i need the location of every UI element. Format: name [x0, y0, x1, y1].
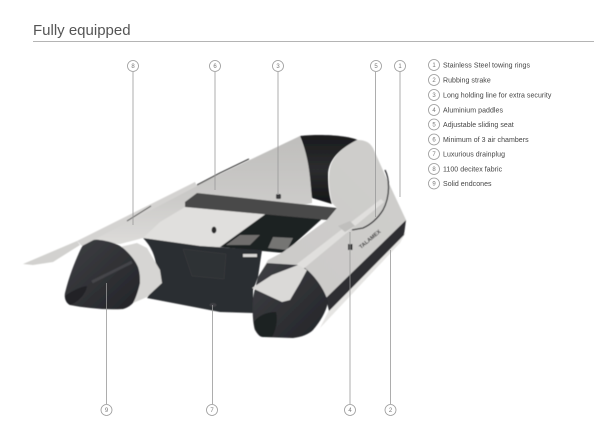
- legend item 4: 4: [432, 108, 436, 114]
- left tube: [83, 136, 312, 248]
- legend item 2: 2: [432, 78, 436, 84]
- callout 8: 8: [131, 64, 135, 70]
- bow black band: [300, 135, 358, 204]
- paddle blade: [23, 241, 80, 265]
- legend item 8: 8: [432, 167, 436, 173]
- callout 4: [344, 232, 356, 416]
- transom plate: [183, 249, 226, 279]
- legend item 4: [428, 104, 503, 116]
- oar strap: [127, 206, 151, 221]
- legend item 9: [428, 178, 492, 189]
- callout 2: 2: [389, 408, 393, 414]
- legend item 5: [428, 119, 514, 130]
- callout 5: 5: [374, 64, 378, 70]
- drainplug: [210, 303, 216, 307]
- legend item 6: Minimum of 3 air chambers: [443, 137, 529, 144]
- floor plate 2: [268, 237, 293, 250]
- legend item 1: [428, 60, 530, 70]
- title: Fully equipped: [33, 22, 131, 39]
- under-strake light side: [320, 232, 406, 328]
- callout 8: [128, 60, 138, 225]
- paddle blade: [252, 265, 307, 302]
- right endcone: [253, 263, 328, 338]
- right rope: [352, 170, 389, 230]
- floor: [220, 208, 334, 253]
- legend item 8: [428, 164, 503, 174]
- oarlock: [338, 221, 355, 232]
- right endcone tip: [254, 312, 277, 337]
- left endcone: [65, 240, 140, 309]
- callout 7: [206, 305, 218, 416]
- near paddle: [252, 199, 384, 302]
- rubbing strake: [326, 220, 406, 311]
- callout 1: [394, 60, 406, 197]
- legend item 7: [428, 148, 505, 160]
- legend item 6: [428, 134, 529, 145]
- legend item 7: Luxurious drainplug: [443, 151, 505, 158]
- left tube light cylinder: [143, 207, 267, 247]
- callout 3: [272, 60, 284, 195]
- legend: [428, 60, 552, 189]
- callout 2: [385, 250, 396, 416]
- legend item 9: 9: [432, 182, 436, 188]
- transom: [143, 238, 262, 313]
- seat clamp: [276, 194, 281, 199]
- legend item 9: Solid endcones: [443, 181, 492, 188]
- floor plate 1: [226, 235, 260, 245]
- legend item 2: [428, 74, 491, 86]
- boat: [23, 135, 406, 338]
- legend item 5: Adjustable sliding seat: [443, 122, 514, 129]
- paddle shaft: [297, 199, 384, 270]
- callout 4: 4: [348, 408, 352, 414]
- callout 9: 9: [105, 408, 109, 414]
- legend item 5: 5: [432, 123, 436, 129]
- callout 5: [370, 60, 382, 217]
- callout 1: 1: [398, 64, 402, 70]
- legend item 1: 1: [432, 63, 436, 69]
- legend item 3: [428, 90, 552, 100]
- left endcone highlight: [92, 262, 132, 282]
- legend item 3: Long holding line for extra security: [443, 92, 552, 99]
- legend item 6: 6: [432, 138, 436, 144]
- callout 3: 3: [276, 64, 280, 70]
- callout 9: [101, 283, 112, 416]
- right tube top: [258, 140, 406, 298]
- bench: [185, 193, 337, 220]
- title rule: [33, 40, 594, 42]
- callout 6: 6: [213, 64, 217, 70]
- legend item 8: 1100 decitex fabric: [443, 166, 503, 173]
- legend item 7: 7: [432, 152, 436, 158]
- towing ring: [348, 244, 352, 250]
- drain valve: [212, 227, 216, 233]
- left endcone tip: [65, 286, 87, 305]
- legend item 1: Stainless Steel towing rings: [443, 62, 530, 69]
- left grey collar: [120, 243, 162, 303]
- left paddle: [23, 182, 197, 265]
- transom label: [243, 254, 257, 257]
- paddle shaft: [77, 182, 197, 246]
- legend item 2: Rubbing strake: [443, 77, 491, 84]
- callout 6: [210, 60, 220, 190]
- legend item 3: 3: [432, 93, 436, 99]
- Talamex logo: TALAMEX: [358, 229, 383, 251]
- left rope: [197, 159, 249, 185]
- legend item 4: Aluminium paddles: [443, 107, 503, 114]
- callout 7: 7: [210, 408, 214, 414]
